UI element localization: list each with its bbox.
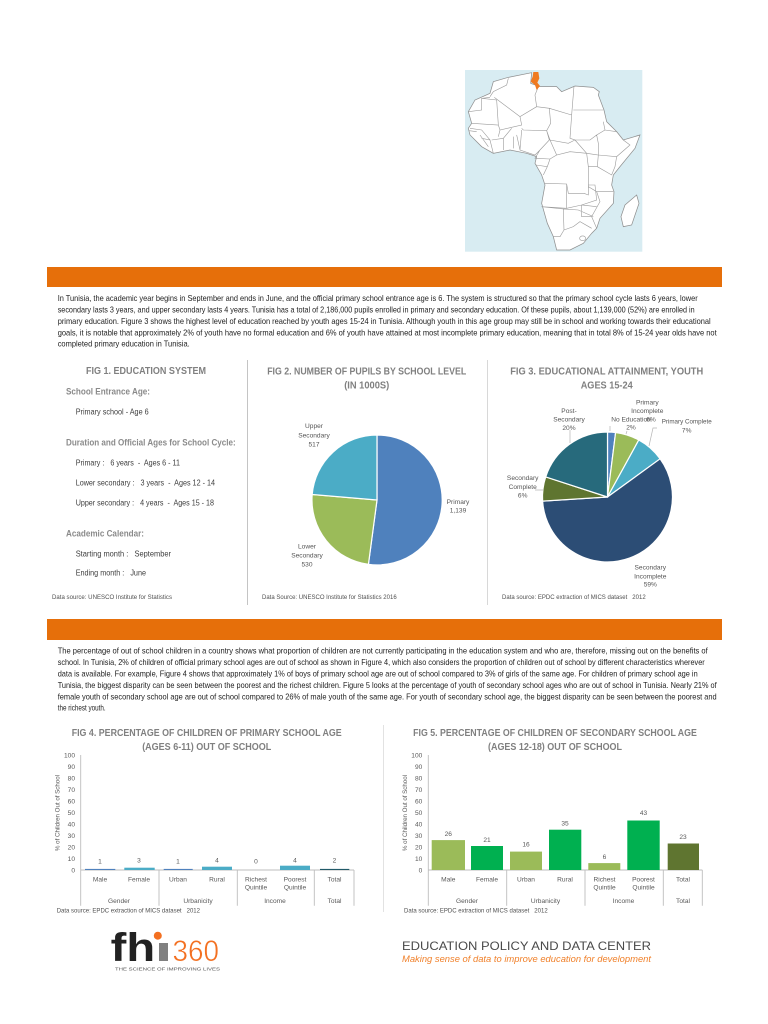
Fig 1 details: Duration and Official Ages for School Cycle: [66, 438, 236, 448]
bar chart: Fig 4: Total [328, 876, 342, 884]
pie labels: attainment: 20% [562, 425, 576, 432]
Fig 1 source: Data source: UNESCO Institute for Statistics [52, 594, 173, 601]
bar chart: Fig 4: Female [128, 876, 150, 884]
bar chart: Fig 5: % of Children Out of School [402, 775, 409, 851]
bar chart: Fig 5: Quintile [632, 884, 655, 892]
Fig 5 heading: (AGES 12-18) OUT OF SCHOOL [488, 742, 623, 753]
pie labels: attainment: 6% [646, 416, 656, 424]
out of school paragraph: school. In Tunisia, 2% of children of official primary school ages are out of school as shown in Figure 4, which also considers the proportion of children out of school by different characteristics wherever [58, 658, 705, 667]
pie labels: attainment: Primary [636, 400, 659, 406]
panel: Fig 3 educational attainment [502, 366, 712, 601]
bar chart: Fig 4: Poorest [284, 876, 307, 884]
bar chart: Fig 5: Rural [557, 876, 573, 884]
bar chart: Fig 5: 20 [415, 844, 423, 851]
bar chart: Fig 4: 4 [215, 858, 219, 864]
intro paragraph: secondary lasts 3 years, and upper secondary lasts 4 years. Tunisia has a total of 2,186,000 pupils enrolled in primary and secondary education. Of these pupils, about 1,139,000 (52%) are enrolled in [58, 306, 695, 314]
bar chart: Fig 4: Urban [169, 876, 187, 884]
bar chart: Fig 4: 20 [68, 844, 75, 851]
Fig 4 heading [72, 728, 342, 753]
bar chart: Fig 4: Urbanicity [183, 898, 213, 905]
bar chart: Fig 5: Urbanicity [531, 898, 561, 905]
Fig 1 heading: FIG 1. EDUCATION SYSTEM [86, 366, 206, 377]
bar chart: Fig 5: 26 [445, 831, 452, 838]
Fig 4 heading: (AGES 6-11) OUT OF SCHOOL [142, 742, 272, 753]
logo: Education Policy and Data Center [402, 939, 652, 964]
pie labels: attainment: 2% [626, 424, 636, 432]
pie labels: pupils: Secondary [291, 552, 323, 560]
bar chart: Fig 5: 90 [415, 764, 423, 771]
Fig 1 details: Starting month : September [76, 550, 171, 558]
logo: Education Policy and Data Center: EDUCATION POLICY AND DATA CENTER [402, 939, 651, 953]
panel: Fig 4 primary out of school [54, 728, 354, 914]
pie labels: attainment: Incomplete [631, 408, 664, 415]
bar chart: Fig 5: Male [441, 876, 456, 884]
pie chart: attainment [542, 432, 672, 562]
Fig 1 details: Lower secondary : 3 years - Ages 12 - 14 [76, 478, 216, 488]
bar chart: Fig 5: 0 [419, 867, 423, 874]
pie labels: attainment: No Education [611, 416, 651, 424]
pie labels: attainment: Secondary [635, 564, 667, 572]
logo: FHI 360: THE SCIENCE OF IMPROVING LIVES [115, 966, 220, 972]
section banner 2 [47, 619, 722, 640]
bar chart: Fig 4: Male [93, 876, 107, 884]
bar chart: Fig 4: 50 [68, 810, 75, 817]
Fig 5 heading [413, 728, 697, 753]
bar chart: Fig 5: Total [676, 898, 690, 905]
Fig 1 details: Primary school - Age 6 [76, 408, 149, 416]
bar chart: Fig 4: 3 [137, 858, 141, 864]
bar chart: Fig 4: 0 [71, 867, 75, 874]
Fig 2 heading [267, 366, 467, 392]
out of school paragraph [58, 646, 717, 712]
pie labels: pupils: Upper [305, 423, 324, 430]
out of school paragraph: The percentage of out of school children in a country shows what proportion of children are not currently participating in the education system and who are, therefore, missing out on the benefits of [58, 646, 708, 656]
bar chart: Fig 4: Quintile [284, 884, 307, 892]
bar chart: Fig 4: 4 [293, 858, 297, 864]
intro paragraph: goals, it is notable that approximately 2% of youth have no formal education and 6% of youth have attained at most incomplete primary education, meaning that in total 8% of 15-24 year olds have not [58, 328, 717, 338]
logo: Education Policy and Data Center: Making sense of data to improve education for development [402, 954, 652, 964]
logo: FHI 360: fh [111, 926, 155, 970]
bar chart: Fig 4: 70 [68, 787, 75, 794]
bar chart: Fig 5: 40 [415, 821, 423, 828]
pie labels: attainment: Complete [509, 484, 537, 491]
pie labels: attainment: Secondary [507, 475, 539, 482]
panel: Fig 2 pupils by school level [262, 366, 470, 601]
pie labels: attainment [507, 400, 712, 588]
bar chart: Fig 4: 80 [68, 775, 75, 782]
Fig 3 heading: FIG 3. EDUCATIONAL ATTAINMENT, YOUTH [510, 366, 703, 378]
Fig 3 source: Data source: EPDC extraction of MICS dataset 2012 [502, 594, 646, 601]
Fig 1 details: Ending month : June [76, 568, 146, 578]
Fig 5 heading: FIG 5. PERCENTAGE OF CHILDREN OF SECONDARY SCHOOL AGE [413, 728, 697, 739]
bar chart: Fig 5: Total [676, 876, 690, 884]
intro paragraph: In Tunisia, the academic year begins in September and ends in June, and the official primary school entrance age is 6. The system is structured so that the primary school cycle lasts 6 years, lower [58, 294, 698, 303]
bar chart: Fig 4: 100 [64, 752, 75, 759]
bar chart: Fig 5: 21 [483, 837, 491, 844]
bar chart: Fig 5: 60 [415, 798, 423, 805]
Fig 2 heading: FIG 2. NUMBER OF PUPILS BY SCHOOL LEVEL [267, 366, 467, 378]
bar chart: Fig 4: 90 [68, 764, 75, 771]
bar chart: Fig 4: 1 [98, 858, 102, 866]
pie labels: pupils: 530 [301, 562, 313, 568]
bar chart: Fig 5: 35 [561, 820, 569, 828]
pie labels: pupils: Primary [447, 499, 470, 506]
map of Africa with Tunisia highlighted [465, 70, 642, 252]
Fig 1 details [66, 386, 236, 578]
pie labels: attainment: Incomplete [634, 574, 667, 580]
logo: FHI 360: 360 [172, 935, 219, 968]
bar chart: Fig 5: Female [476, 876, 498, 884]
out of school paragraph: data is available. For example, Figure 4 shows that approximately 1% of boys of primary school age are out of school compared to 3% of girls of the same age. For children of primary school age in [58, 670, 698, 678]
bar chart: Fig 5: 23 [679, 834, 687, 841]
bar chart: Fig 5: Richest [594, 876, 616, 884]
bar chart: Fig 5: Income [613, 898, 635, 905]
pie labels: attainment: Primary Complete [662, 418, 712, 426]
bar chart: Fig 4: 1 [176, 858, 180, 866]
bar chart: Fig 5: 70 [415, 787, 423, 794]
pie labels: attainment: 59% [644, 582, 657, 588]
bar chart: Fig 5: Poorest [632, 876, 655, 884]
bar chart: Fig 5: Urban [517, 876, 535, 884]
Fig 3 heading: AGES 15-24 [581, 380, 633, 392]
Fig 1 details: Academic Calendar: [66, 528, 144, 540]
pie labels: attainment: 7% [682, 428, 692, 434]
bar chart: Fig 5: 43 [640, 810, 647, 817]
bar chart: Fig 4: Rural [209, 876, 225, 884]
bar chart: Fig 4: 2 [333, 858, 337, 864]
Fig 2 source: Data Source: UNESCO Institute for Statistics 2016 [262, 594, 397, 601]
pie labels: attainment: Secondary [553, 416, 585, 424]
pie labels: pupils: Lower [298, 544, 317, 550]
bar chart: Fig 4: 0 [254, 858, 258, 866]
pie labels: attainment: 6% [518, 492, 528, 500]
section banner 1 [47, 267, 722, 287]
panel: Fig 1 education system [52, 366, 236, 601]
pie labels: pupils: Secondary [298, 432, 330, 440]
bar chart: Fig 5: Gender [456, 898, 479, 905]
bar chart: Fig 4: 40 [68, 821, 75, 828]
bar chart: Fig 4: 60 [68, 798, 75, 805]
pie labels: attainment: Post- [561, 408, 577, 415]
Fig 3 heading [510, 366, 703, 392]
Fig 1 details: Upper secondary : 4 years - Ages 15 - 18 [76, 498, 214, 508]
bar chart: Fig 4: Gender [108, 898, 131, 905]
pie labels: pupils: 1,139 [450, 508, 467, 514]
bar chart: Fig 5: 10 [415, 856, 423, 863]
Fig 2 heading: (IN 1000S) [344, 380, 389, 392]
bar chart: Fig 4: % of Children Out of School [54, 775, 62, 851]
bar chart: Fig 4: 10 [68, 856, 75, 863]
bar chart: Fig 5: 50 [415, 810, 423, 817]
bar chart: Fig 5: 100 [411, 752, 423, 759]
Fig 5 source: Data source: EPDC extraction of MICS dataset 2012 [404, 908, 548, 914]
Fig 4 source: Data source: EPDC extraction of MICS dataset 2012 [57, 908, 200, 914]
pie labels: pupils: 517 [308, 442, 320, 448]
bar chart: Fig 5 [402, 752, 702, 906]
logo: FHI 360 [111, 926, 220, 972]
bar chart: Fig 4: Total [328, 898, 342, 905]
Fig 1 details: Primary : 6 years - Ages 6 - 11 [76, 458, 180, 468]
pie labels: pupils [291, 423, 470, 568]
bar chart: Fig 4: 30 [68, 833, 75, 840]
intro paragraph: completed primary education in Tunisia. [58, 340, 190, 348]
bar chart: Fig 5: 30 [415, 833, 423, 840]
out of school paragraph: female youth of secondary school age are out of school compared to 26% of male youth of the same age. For youth of secondary school age, the biggest disparity can be seen between the poorest and [58, 692, 717, 702]
bar chart: Fig 5: 80 [415, 775, 423, 782]
bar chart: Fig 4: Quintile [245, 884, 268, 892]
bar chart: Fig 5: Quintile [593, 884, 616, 892]
bar chart: Fig 4 [54, 752, 354, 906]
panel: Fig 5 secondary out of school [402, 728, 702, 914]
bar chart: Fig 4: Income [264, 898, 286, 905]
out of school paragraph: the richest youth. [58, 704, 106, 712]
Fig 4 heading: FIG 4. PERCENTAGE OF CHILDREN OF PRIMARY SCHOOL AGE [72, 728, 342, 739]
bar chart: Fig 5: 6 [603, 854, 607, 861]
bar chart: Fig 4: Richest [245, 876, 267, 884]
pie chart: pupils [312, 435, 442, 565]
bar chart: Fig 5: 16 [522, 842, 530, 848]
Fig 1 details: School Entrance Age: [66, 386, 150, 398]
intro paragraph [58, 294, 717, 348]
intro paragraph: primary education. Figure 3 shows the highest level of education reached by youth ages 15-24 in Tunisia. Although youth in this age group may still be in school and working towards their educational [58, 317, 711, 326]
